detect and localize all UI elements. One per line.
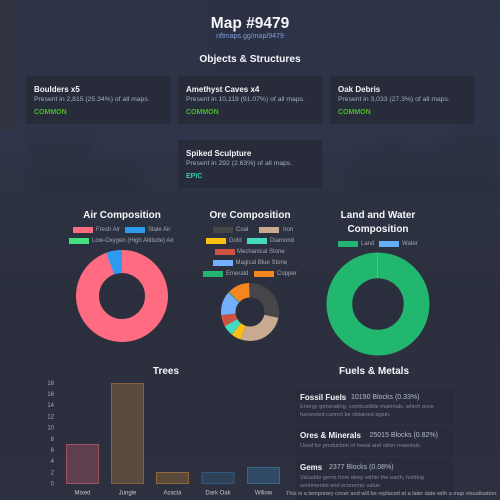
- bars: [66, 384, 280, 484]
- card: spiked sculpture: EPIC: [186, 173, 202, 180]
- x axis labels: [74, 490, 273, 496]
- legend: air: [69, 226, 174, 244]
- x axis labels: Mixed: [74, 490, 91, 496]
- heading: trees: Trees: [153, 366, 179, 377]
- card: boulders: Present in 2,815 (25.34%) of all maps.: [34, 96, 150, 102]
- legend: ore: Coal: [236, 226, 248, 232]
- card: boulders: [26, 76, 170, 124]
- row: fossil fuels: [296, 388, 454, 424]
- card: oak debris: Oak Debris: [338, 84, 380, 94]
- legend: ore: Copper: [277, 270, 297, 276]
- x axis labels: Jungle: [119, 490, 137, 496]
- y axis labels: 6: [51, 448, 55, 454]
- row: gems: Valuable gems from deep within the earth, holding: [300, 474, 424, 480]
- heading: fuels and metals: Fuels & Metals: [339, 366, 409, 377]
- row: gems: [296, 458, 454, 500]
- row: fossil fuels: Fossil Fuels: [300, 393, 346, 402]
- x axis labels: Dark Oak: [205, 490, 232, 496]
- heading: ore composition: Ore Composition: [209, 210, 291, 221]
- legend: land and water: [338, 240, 418, 247]
- legend: ore: Emerald: [226, 270, 248, 276]
- legend: land and water: Land: [361, 240, 374, 246]
- donut: ore composition: [221, 283, 279, 341]
- legend: land and water: Water: [402, 240, 418, 246]
- y axis labels: 16: [47, 392, 55, 398]
- left background edge: [0, 0, 16, 130]
- legend: ore: Gold: [229, 238, 242, 244]
- x axis labels: Acacia: [163, 490, 182, 496]
- row: fossil fuels: harvested cannot be obtained again.: [300, 412, 391, 418]
- legend: air: Fresh Air: [96, 226, 120, 232]
- legend: air: Low-Oxygen (High Altitude) Air: [92, 238, 174, 244]
- card: boulders: Boulders x5: [34, 84, 80, 94]
- y axis labels: [47, 381, 55, 488]
- card: oak debris: COMMON: [338, 109, 371, 116]
- card: amethyst caves: COMMON: [186, 109, 219, 116]
- legend: ore: [203, 226, 297, 277]
- row: ores and minerals: Ores & Minerals: [300, 431, 361, 440]
- y axis labels: 12: [47, 414, 55, 420]
- legend: ore: Diamond: [270, 238, 294, 244]
- card: oak debris: Present in 3,033 (27.3%) of all maps.: [338, 96, 450, 102]
- x axis labels: Willow: [255, 490, 273, 496]
- y axis labels: 4: [51, 459, 55, 465]
- donut: land and water composition: [326, 252, 430, 356]
- map link: nftmaps.gg/map/9479: [216, 33, 284, 40]
- card: spiked sculpture: Present in 292 (2.63%) of all maps.: [186, 160, 292, 166]
- row: ores and minerals: Used for production of metal and other materials.: [300, 443, 421, 449]
- legend: ore: Magical Blue Stone: [236, 260, 287, 266]
- row: ores and minerals: [296, 426, 454, 456]
- row: fossil fuels: 10190 Blocks (0.33%): [351, 394, 419, 401]
- heading: land and water composition: Composition: [347, 224, 409, 235]
- heading: land and water composition: Land and Water: [341, 210, 415, 221]
- y axis labels: 2: [51, 470, 55, 476]
- row: gems: sentimental and economic value.: [300, 482, 381, 488]
- y axis labels: 8: [51, 437, 55, 443]
- heading: objects and structures: Objects & Structures: [199, 54, 301, 65]
- card: amethyst caves: Present in 10,119 (91.07%) of all maps.: [186, 96, 305, 102]
- card: spiked sculpture: Spiked Sculpture: [186, 148, 251, 158]
- card: amethyst caves: Amethyst Caves x4: [186, 84, 259, 94]
- card: amethyst caves: [178, 76, 322, 124]
- row: ores and minerals: 25015 Blocks (0.82%): [370, 432, 438, 438]
- donut: air composition: [76, 250, 168, 342]
- row: gems: Gems: [300, 462, 322, 472]
- title: Map #9479: [211, 15, 289, 32]
- card: boulders: COMMON: [34, 109, 67, 116]
- y axis labels: 14: [47, 403, 55, 409]
- legend: air: Stale Air: [148, 226, 170, 232]
- y axis labels: 0: [51, 482, 55, 488]
- row: fossil fuels: Energy generating, combustible materials, which once: [300, 404, 434, 410]
- legend: ore: Iron: [283, 226, 293, 232]
- card: oak debris: [330, 76, 474, 124]
- heading: land and water composition: [341, 210, 416, 235]
- legend: ore: Mechanical Stone: [237, 248, 285, 254]
- y axis labels: 18: [47, 381, 55, 387]
- heading: air composition: Air Composition: [83, 210, 161, 221]
- footer note: This is a temporary cover and will be replaced at a later date with a map visualisation.: [286, 491, 498, 497]
- card: spiked sculpture: [178, 140, 322, 188]
- y axis labels: 10: [47, 426, 55, 432]
- row: gems: 2377 Blocks (0.08%): [329, 464, 394, 470]
